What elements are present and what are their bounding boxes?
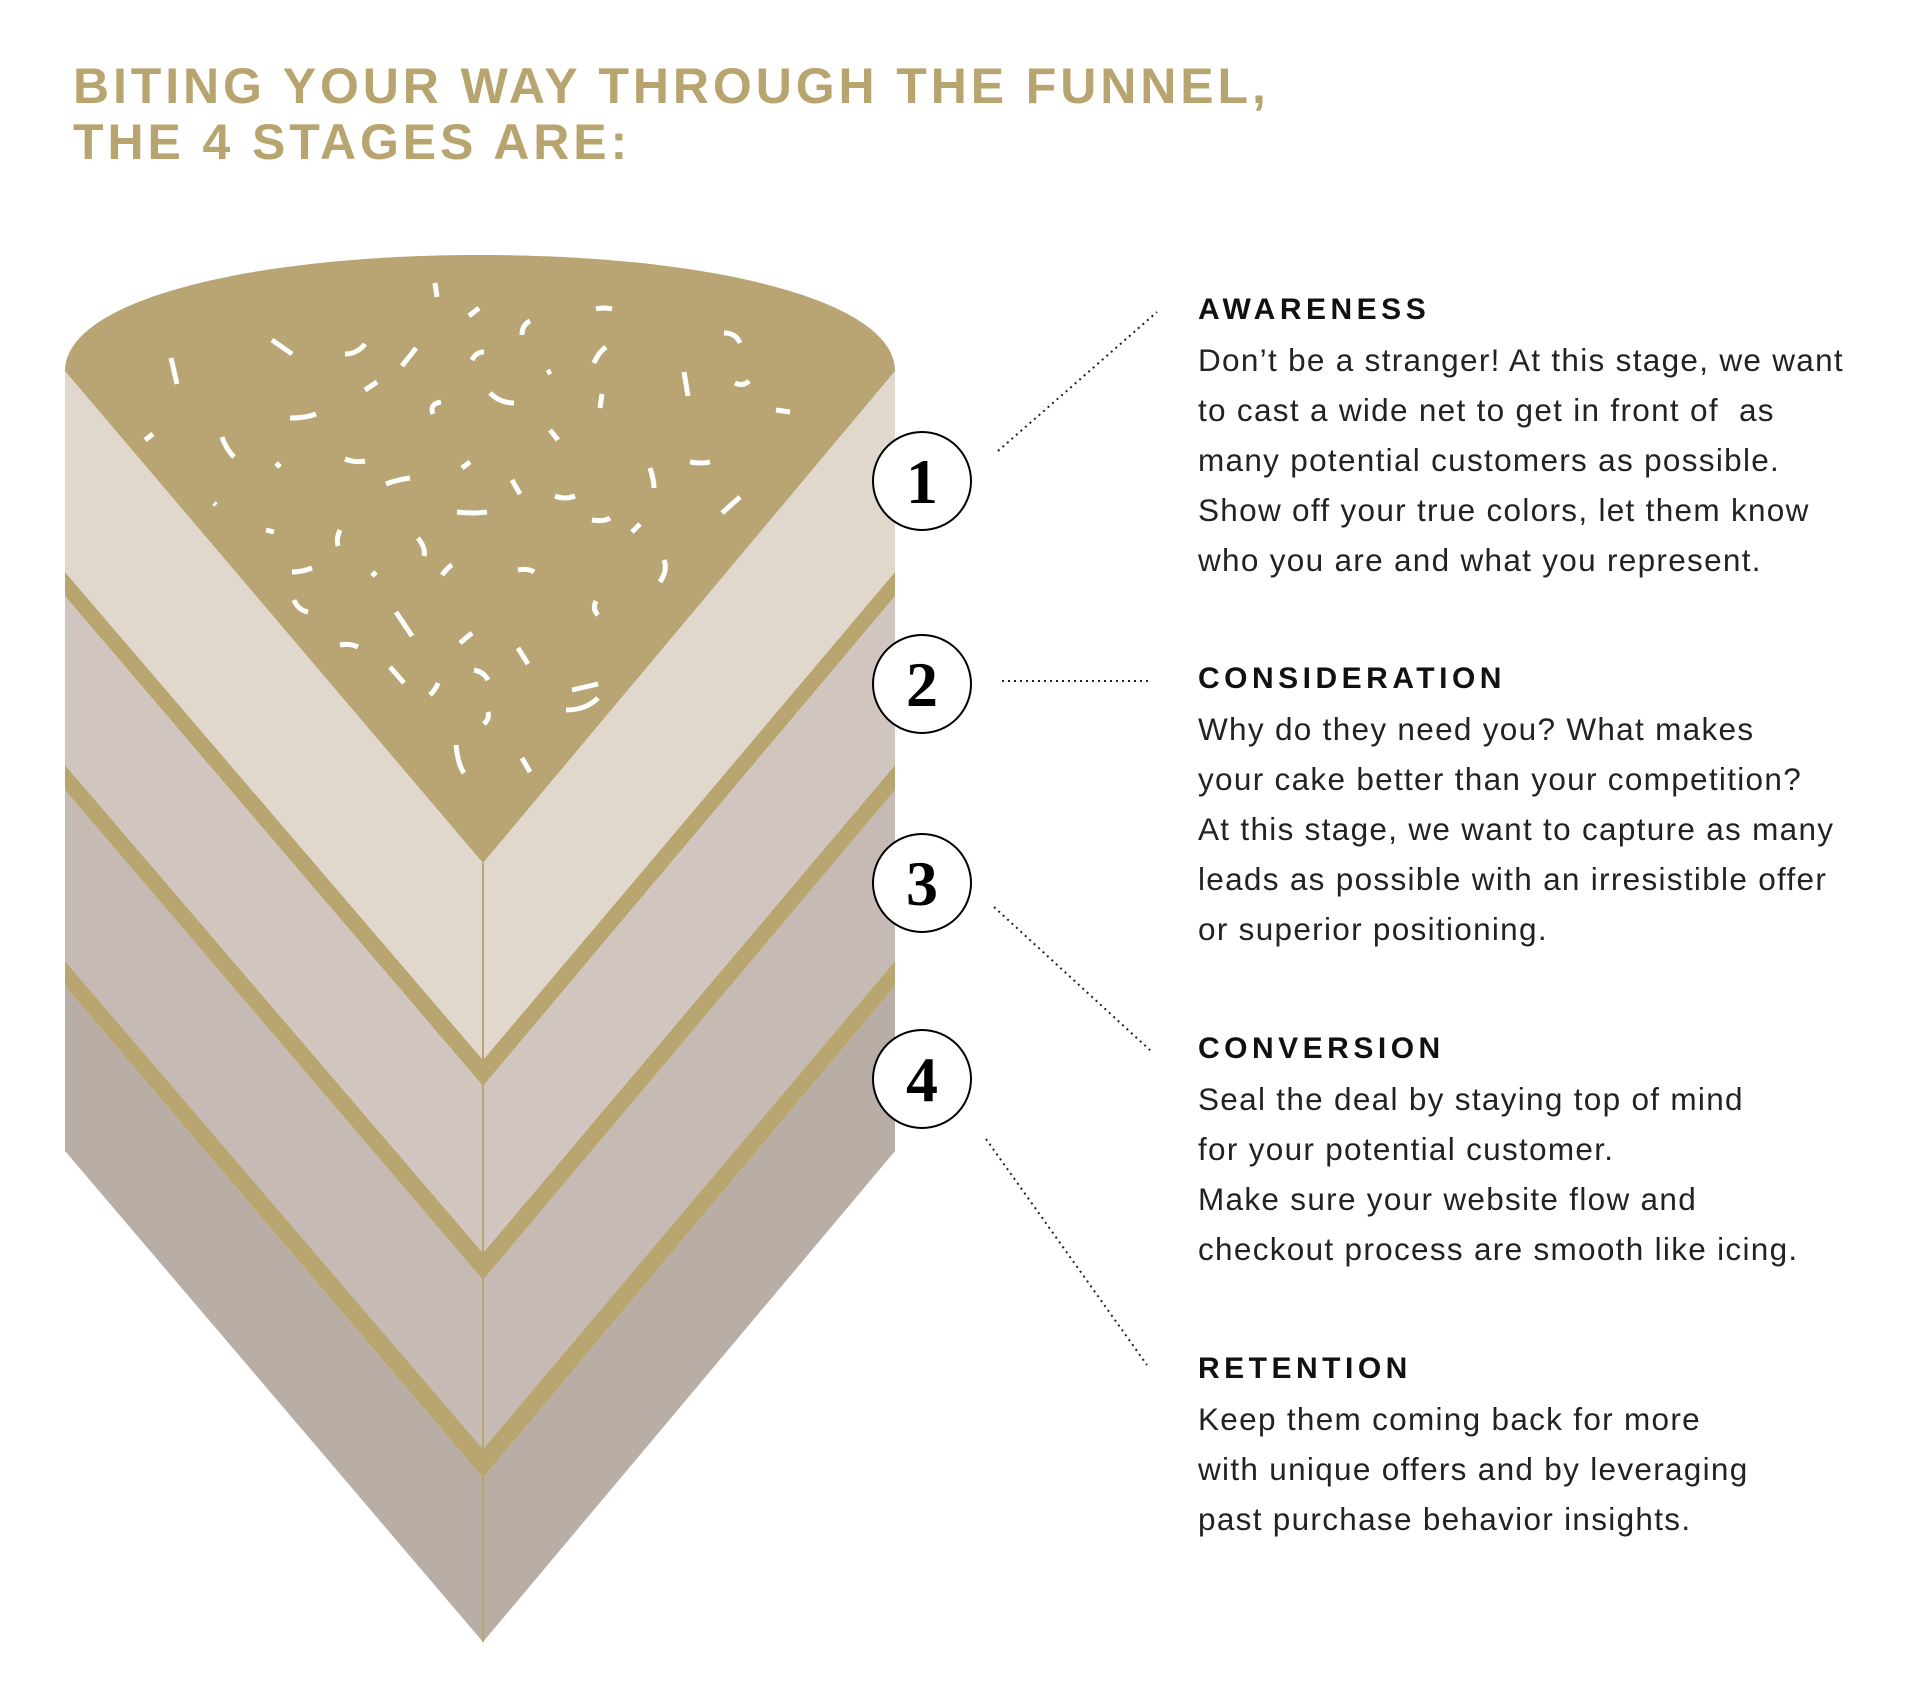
stage: consideration: At this stage, we want to capture as many: [1198, 811, 1834, 847]
stage: conversion: Seal the deal by staying top of mind: [1198, 1081, 1744, 1117]
layer 3: [65, 790, 895, 1449]
number circles: 1: [906, 446, 938, 517]
stage: retention: Keep them coming back for more: [1198, 1401, 1701, 1437]
dotted connectors: [986, 312, 1157, 1365]
title: [73, 58, 1270, 170]
stage: retention: RETENTION: [1198, 1352, 1412, 1385]
stage: awareness: many potential customers as possible.: [1198, 442, 1780, 478]
stripe 2: [65, 765, 895, 1280]
stage: conversion: [1198, 1032, 1798, 1267]
stripe 3: [65, 961, 895, 1478]
stage: awareness: Show off your true colors, let them know: [1198, 492, 1810, 528]
stage: conversion: Make sure your website flow and: [1198, 1181, 1697, 1217]
stage: conversion: for your potential customer.: [1198, 1131, 1614, 1167]
stage: consideration: leads as possible with an irresistible offer: [1198, 861, 1827, 897]
layer 2: [65, 596, 895, 1253]
number circles: 4: [906, 1044, 938, 1115]
stage: retention: with unique offers and by leveraging: [1198, 1451, 1749, 1487]
stage: consideration: Why do they need you? What makes: [1198, 711, 1754, 747]
layer 4 (bottom): [65, 986, 895, 1642]
stage: awareness: to cast a wide net to get in front of as: [1198, 392, 1775, 428]
stripe 1: [65, 572, 895, 1086]
title: THE 4 STAGES ARE:: [73, 114, 631, 170]
number circles: [873, 432, 971, 1128]
stage: retention: past purchase behavior insights.: [1198, 1501, 1691, 1537]
number circles: 2: [906, 649, 938, 720]
stage: awareness: [1198, 293, 1844, 578]
stage: awareness: Don’t be a stranger! At this stage, we want: [1198, 342, 1844, 378]
stage: awareness: AWARENESS: [1198, 293, 1430, 326]
stage: conversion: CONVERSION: [1198, 1032, 1445, 1065]
stage: consideration: CONSIDERATION: [1198, 662, 1506, 695]
stage: awareness: who you are and what you represent.: [1198, 542, 1762, 578]
top icing: [65, 255, 895, 863]
stage: consideration: [1198, 662, 1834, 947]
number circles: 3: [906, 848, 938, 919]
stage: consideration: or superior positioning.: [1198, 911, 1548, 947]
stage: consideration: your cake better than your competition?: [1198, 761, 1802, 797]
layer 1: [65, 371, 895, 1060]
title: BITING YOUR WAY THROUGH THE FUNNEL,: [73, 58, 1270, 114]
stage: retention: [1198, 1352, 1749, 1537]
stage: conversion: checkout process are smooth like icing.: [1198, 1231, 1798, 1267]
sprinkles: [145, 283, 790, 773]
